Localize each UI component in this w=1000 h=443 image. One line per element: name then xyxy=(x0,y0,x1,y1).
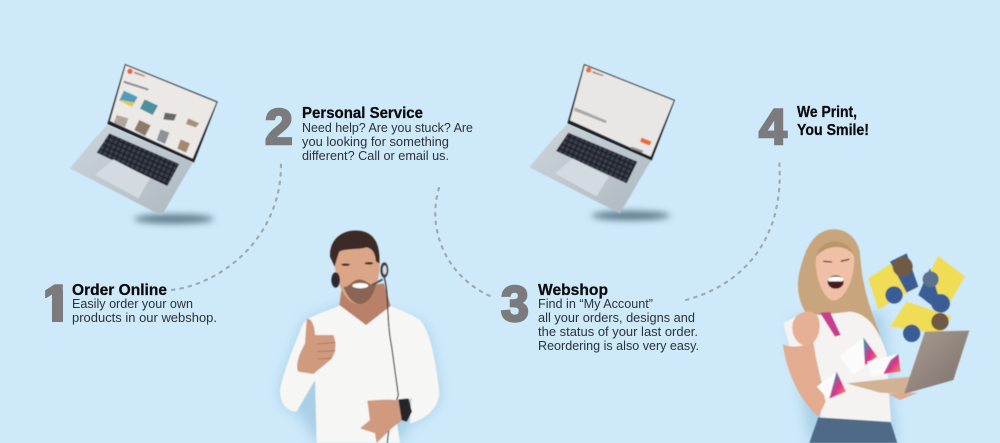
step 2: personal service: 2 xyxy=(265,99,293,155)
photo: excited woman with laptop and printed flyers xyxy=(783,229,969,443)
dashed connector: step 1 to step 2 xyxy=(172,163,281,290)
step 2: personal service: Need help? Are you stuck? Are xyxy=(302,120,473,135)
step 2: personal service xyxy=(265,99,473,163)
step 4: we print, you smile: We Print, xyxy=(797,104,857,121)
laptop showing account page xyxy=(529,64,675,220)
step 3: webshop: all your orders, designs and xyxy=(538,310,695,325)
step 1: order online: Order Online xyxy=(72,282,167,299)
flying flyers xyxy=(868,253,965,342)
step 3: webshop: Webshop xyxy=(538,282,608,299)
step 1: order online: products in our webshop. xyxy=(72,310,217,325)
step 4: we print, you smile: 4 xyxy=(759,99,787,155)
step 1: order online: 1 xyxy=(43,275,71,331)
photo: support agent with headset and thumbs up xyxy=(280,231,439,443)
dashed connector: step 2 to step 3 xyxy=(435,188,495,298)
laptop showing webshop products xyxy=(70,64,218,224)
dashed connector: step 3 to step 4 xyxy=(686,158,780,300)
step 1: order online: Easily order your own xyxy=(72,296,193,311)
step 3: webshop: the status of your last order. xyxy=(538,324,698,339)
step 3: webshop: Find in “My Account” xyxy=(538,296,653,311)
step 1: order online xyxy=(38,275,217,331)
step 3: webshop: Reordering is also very easy. xyxy=(538,338,699,353)
step 2: personal service: different? Call or email us. xyxy=(302,148,449,163)
step 4: we print, you smile xyxy=(759,99,869,155)
step 2: personal service: you looking for something xyxy=(302,134,449,149)
step 4: we print, you smile: You Smile! xyxy=(797,122,869,139)
step 2: personal service: Personal Service xyxy=(302,105,423,122)
step 3: webshop xyxy=(501,276,699,353)
step 3: webshop: 3 xyxy=(501,276,529,332)
